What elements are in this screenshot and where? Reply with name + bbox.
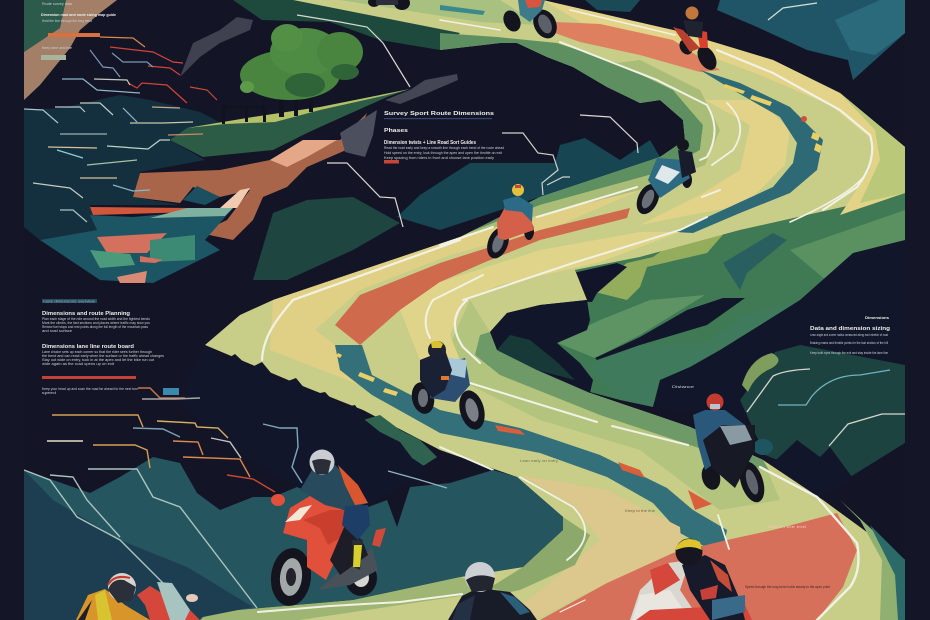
motorcycle: large red foreground	[268, 450, 386, 608]
motorcycle: red rider top right	[673, 6, 720, 73]
forest edge: lower-left tree line	[180, 345, 437, 510]
text: top-left notes: Route survey data	[42, 2, 72, 6]
teal patch	[753, 439, 773, 455]
contour lines	[24, 15, 638, 227]
ribbon dashes	[723, 84, 822, 153]
panel: upper-right	[585, 0, 905, 80]
tan lower lane	[500, 475, 682, 620]
text block: left: route dimensions overview	[43, 300, 96, 304]
peach highlights	[270, 140, 337, 167]
yellow centre	[640, 100, 790, 225]
valley foot band	[200, 577, 500, 620]
motorcycle: blue rider mid road	[409, 341, 489, 432]
orange band middle	[335, 208, 630, 345]
heading block: centre: Hold speed on the entry, look through the apex and open the throttle on exit	[384, 151, 502, 155]
green corner	[24, 0, 66, 52]
heading block: centre: Survey Sport Route Dimensions	[384, 111, 494, 117]
panel: top-left landscape	[24, 0, 660, 283]
lime slope	[587, 230, 727, 300]
text block: right: Data and dimension sizing	[810, 326, 890, 332]
road	[200, 0, 905, 620]
dark green upper slope	[233, 0, 460, 50]
small road notes: Speed through the long bend holds steady to the apex point	[745, 585, 830, 589]
text block: right	[810, 315, 890, 355]
motorcycle: red rider centre	[483, 184, 534, 261]
tan hillside band	[24, 0, 117, 100]
outer bands lower	[840, 500, 905, 620]
road surface	[200, 0, 905, 620]
mid yellow lane	[270, 190, 640, 385]
text block: left: Review fuel stops and rest points along the full length of the mountain pass	[42, 325, 148, 329]
orange hill	[133, 113, 367, 240]
text: top-left notes: Hold the line through the long bend	[42, 19, 92, 23]
valley lines	[24, 469, 257, 608]
green bend	[470, 517, 590, 600]
text block: left: speed	[42, 391, 56, 395]
lime bush	[742, 353, 778, 392]
green upper edge	[475, 332, 770, 472]
text: top-left notes: Keep lane and line	[42, 46, 72, 50]
text block: left: Stay out wide on entry, tuck in at the apex and let the bike run out	[42, 358, 154, 362]
text block: left: and road surface	[42, 329, 72, 333]
text block: left: Mark the climbs, the fast sections and places where traffic may slow you	[42, 321, 150, 325]
lower yellow lane	[400, 232, 680, 378]
grey ridge centre	[340, 110, 377, 157]
heading block: centre: Keep spacing from riders in front and choose lane position early	[384, 156, 494, 160]
text block: left: Dimensions and route Planning	[42, 311, 130, 317]
text block: right: Dimensions	[865, 315, 890, 320]
text: top-left notes	[41, 2, 116, 60]
pocket forest: dark S-curve interior	[490, 300, 593, 393]
dark teal lowland	[24, 95, 225, 240]
text block: right: Keep both eyes through the exit and stay inside the lane line	[810, 351, 888, 355]
small road notes: Watch the exit	[768, 525, 806, 529]
motorcycle: bottom-right rider	[630, 538, 752, 620]
dark forest right	[653, 240, 905, 420]
green shoulder inner	[440, 33, 703, 237]
small road notes: Keep to the line	[625, 509, 655, 513]
curve lines	[747, 369, 905, 446]
small road notes: Lean early on entry	[520, 459, 559, 463]
motorcycle: bottom-centre rider	[448, 562, 537, 620]
motorcycle: top rider	[500, 0, 561, 42]
green lawn	[170, 89, 410, 157]
lane lines	[258, 10, 872, 620]
text block: left: wide again as the road opens up on exit	[42, 362, 114, 366]
outer lime edge	[840, 93, 905, 203]
dark band	[595, 298, 745, 360]
text block: right: Lean angle and corner radius measured along each stretch of road	[810, 333, 888, 337]
teal shadow	[723, 233, 787, 290]
text block: left: Lane choice sets up each corner so that the rider sees further through	[42, 350, 152, 354]
dark green under pocket	[497, 335, 575, 380]
grey ridge top	[180, 17, 253, 77]
text block: left: Keep your head up and scan the road far ahead for the next turn	[42, 387, 138, 391]
forest base	[557, 193, 905, 403]
ridge teal	[397, 138, 660, 230]
panel: lower-left valley	[24, 457, 563, 620]
green C	[587, 300, 800, 407]
motorcycle: blue rider upper	[632, 139, 696, 218]
text block: left: Plan each stage of the ride around the road width and the tightest bends	[42, 317, 150, 321]
red strips lower	[495, 425, 525, 435]
pale shoulder	[470, 60, 720, 238]
dark tree crest	[550, 263, 627, 302]
small road notes	[520, 459, 830, 589]
contour lines: left data traces	[47, 388, 447, 492]
lighter slope	[790, 210, 905, 292]
text block: left	[42, 299, 164, 395]
red patch lower right	[540, 513, 857, 620]
pale green S	[452, 300, 780, 510]
lit lawn	[187, 89, 410, 128]
lake	[40, 207, 233, 283]
motorcycle: bottom-left rider	[76, 573, 200, 620]
green A	[555, 295, 705, 358]
panel: dark green data area	[740, 345, 905, 477]
grey ridge far	[385, 74, 458, 104]
fence and trunks	[222, 96, 313, 124]
dark teal forest	[253, 197, 400, 280]
heading block: centre: Dimension twists + Line Road Sort Guides	[384, 140, 476, 146]
text: top-left notes: Dimension road and route sizing map guide	[41, 13, 116, 17]
yellow dashes lower	[336, 353, 398, 396]
tree blob	[773, 440, 852, 500]
text block: right: Braking marks and throttle points for the fast section of the hill	[810, 341, 888, 345]
heading block: centre: Phases	[384, 128, 408, 134]
teal hillock	[183, 186, 220, 205]
tan lane top	[543, 0, 905, 215]
motorcycle: top edge	[368, 0, 410, 10]
motorcycle: dark rider right	[693, 394, 769, 505]
teal ribbon upper	[675, 70, 823, 233]
text block: left: the bend and can react early when the surface or the traffic ahead changes	[42, 354, 164, 358]
label: Distance	[672, 384, 695, 389]
top-road teal strip	[340, 0, 540, 25]
heading block: centre: Read the road early and keep a smooth line through each bend of the route ahead	[384, 146, 504, 150]
teal ribbon lower	[335, 345, 727, 556]
text block: left: Dimensions lane line route board	[42, 344, 134, 350]
peach lane top	[555, 22, 720, 72]
panel: right forest	[550, 193, 905, 500]
heading block: centre	[384, 111, 504, 164]
tree	[240, 24, 363, 100]
